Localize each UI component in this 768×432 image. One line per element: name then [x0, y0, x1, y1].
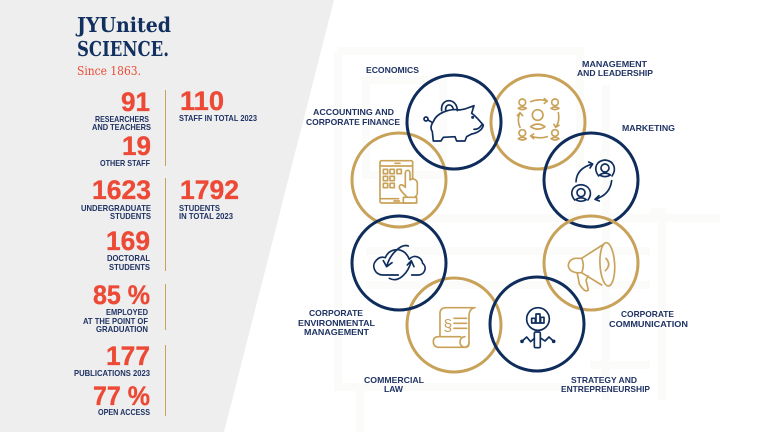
logo heading — [75, 13, 171, 78]
circle: economics — [407, 75, 501, 169]
stat: 110 staff in total: 110 — [180, 86, 224, 116]
circle: commercial law — [407, 278, 501, 372]
stat: 91 researchers and teachers: AND TEACHERS — [92, 122, 151, 132]
icon: magnifier with chart — [521, 308, 555, 348]
icon: legal scroll: § — [443, 318, 452, 335]
stat: 85 % employed: 85 % — [93, 280, 150, 310]
circle: corporate communication — [544, 216, 638, 310]
stat: 177 publications: 177 — [106, 341, 150, 371]
icon: megaphone — [568, 242, 616, 291]
circle: management — [491, 75, 585, 169]
left grey panel — [0, 0, 334, 432]
icon: management people cycle — [517, 99, 559, 140]
stat: 169 doctoral students: DOCTORAL — [107, 253, 150, 263]
circle: strategy — [490, 277, 584, 371]
label: accounting and corporate finance: CORPORATE FINANCE — [306, 117, 400, 127]
label: commercial law: LAW — [384, 384, 403, 394]
label: economics: ECONOMICS — [366, 65, 419, 75]
stat: 110 staff in total — [179, 86, 257, 123]
stat: 19 other staff — [100, 131, 151, 168]
stat: 85 % employed — [83, 280, 150, 334]
logo heading: JYUnited — [75, 13, 171, 37]
stat: 1792 students in total: IN TOTAL 2023 — [179, 211, 233, 221]
label: strategy and entrepreneurship: ENTREPRENEURSHIP — [561, 384, 650, 394]
stat: 85 % employed: GRADUATION — [96, 324, 148, 334]
label: marketing: MARKETING — [622, 123, 675, 133]
stat: 177 publications — [74, 341, 150, 378]
label: commercial law — [364, 375, 424, 394]
stat: 1623 undergraduate students: STUDENTS — [110, 211, 151, 221]
stat: 1792 students in total: STUDENTS — [179, 203, 220, 213]
stat: 1623 undergraduate students: 1623 — [92, 175, 151, 205]
icon: piggy bank — [424, 101, 483, 141]
label: corporate environmental management: CORPORATE — [309, 308, 363, 318]
stat: 77 % open access: OPEN ACCESS — [98, 407, 150, 417]
stat: 19 other staff: OTHER STAFF — [100, 158, 150, 168]
label: management and leadership — [577, 59, 653, 78]
stat: 177 publications: PUBLICATIONS 2023 — [74, 368, 150, 378]
label: commercial law: COMMERCIAL — [364, 375, 424, 385]
label: corporate communication — [609, 309, 688, 329]
label: management and leadership: AND LEADERSHIP — [577, 68, 653, 78]
stat: 91 researchers and teachers: RESEARCHERS — [95, 114, 149, 124]
circle: environmental management — [352, 216, 446, 310]
label: corporate communication: COMMUNICATION — [609, 319, 688, 329]
stat: 91 researchers and teachers: 91 — [121, 87, 150, 117]
label: corporate environmental management: MANAGEMENT — [304, 327, 370, 337]
icon: tablet with pointing hand — [380, 161, 417, 203]
label: corporate environmental management — [298, 308, 375, 337]
icon: cloud with cycle arrows — [374, 246, 425, 280]
stat: 1792 students in total: 1792 — [180, 175, 239, 205]
circle: accounting — [352, 133, 446, 227]
label: strategy and entrepreneurship: STRATEGY AND — [571, 375, 637, 385]
stat: 77 % open access: 77 % — [93, 381, 150, 411]
stat: 85 % employed: AT THE POINT OF — [83, 316, 148, 326]
label: accounting and corporate finance: ACCOUNTING AND — [313, 107, 394, 117]
logo heading: Since 1863. — [77, 63, 141, 78]
label: corporate communication: CORPORATE — [621, 309, 674, 319]
stat: 1623 undergraduate students: UNDERGRADUATE — [81, 203, 151, 213]
label: accounting and corporate finance — [306, 107, 400, 127]
logo heading: SCIENCE. — [77, 37, 169, 61]
stat: 169 doctoral students — [106, 226, 150, 272]
stat: 110 staff in total: STAFF IN TOTAL 2023 — [179, 113, 257, 123]
icon: marketing people exchange — [572, 160, 614, 201]
circle: marketing — [544, 133, 638, 227]
label: management and leadership: MANAGEMENT — [582, 59, 648, 69]
stat: 85 % employed: EMPLOYED — [106, 307, 148, 317]
label: corporate environmental management: ENVIRONMENTAL — [298, 318, 375, 328]
stat: 169 doctoral students: 169 — [106, 226, 150, 256]
stat: 1792 students in total — [179, 175, 239, 221]
stat: 91 researchers and teachers — [92, 87, 151, 132]
stat: 169 doctoral students: STUDENTS — [109, 262, 150, 272]
icon: legal scroll — [433, 308, 475, 347]
stat: 1623 undergraduate students — [81, 175, 151, 221]
label: strategy and entrepreneurship — [561, 375, 650, 394]
stat: 19 other staff: 19 — [122, 131, 151, 161]
